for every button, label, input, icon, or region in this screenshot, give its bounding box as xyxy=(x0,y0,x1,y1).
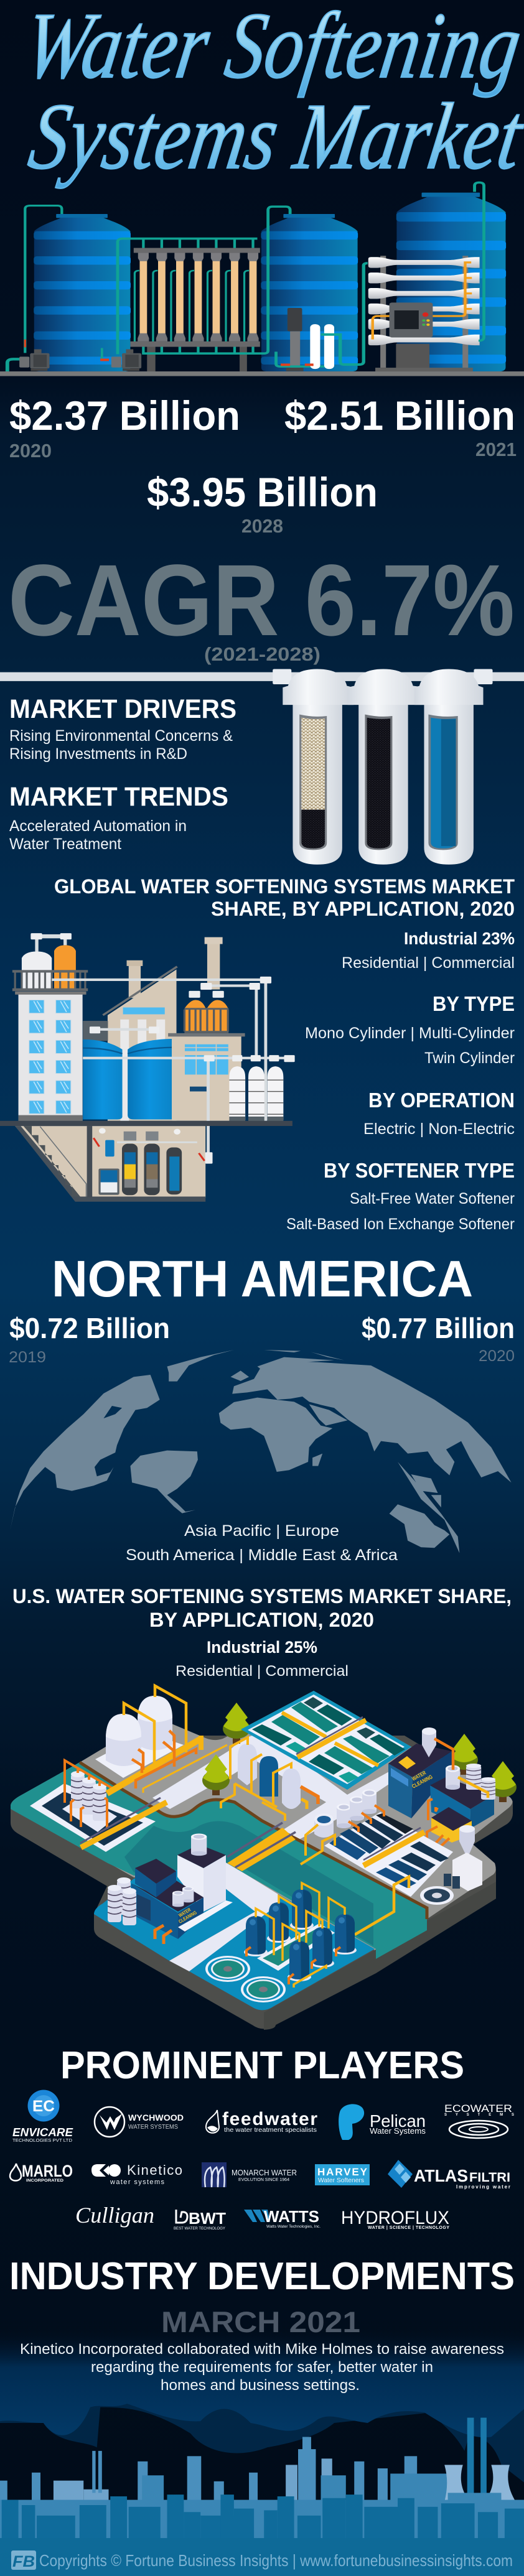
market value 2021 xyxy=(284,393,517,460)
africa xyxy=(219,1398,332,1472)
illustration: water treatment plant with tanks xyxy=(0,182,524,376)
blue softener tanks xyxy=(83,1039,172,1120)
basement with stairs and softeners xyxy=(0,1121,292,1202)
by operation segment: BY OPERATION xyxy=(368,1089,515,1112)
logo: Wychwood: WYCHWOOD xyxy=(128,2113,184,2123)
logo: Envicare: EC xyxy=(32,2098,55,2115)
market value 2021: 2021 xyxy=(475,439,517,460)
logo: Pelican xyxy=(339,2104,426,2140)
global market share heading xyxy=(54,875,515,920)
market value 2028: $3.95 Billion xyxy=(147,469,378,515)
water cleaning building: CLEANING xyxy=(411,1774,434,1790)
market drivers: MARKET DRIVERS xyxy=(9,694,236,724)
membrane filter rack xyxy=(25,206,290,371)
U.S. application share: Industrial 25% xyxy=(207,1638,317,1657)
market value 2028 xyxy=(147,469,378,537)
lower water cleaning building: WATER xyxy=(178,1907,192,1918)
logo: Atlas Filtri: ATLAS xyxy=(414,2166,468,2185)
by type segment xyxy=(305,992,515,1067)
north america value 2020: $0.77 Billion xyxy=(362,1312,515,1344)
logo: EcoWater: ECOWATER xyxy=(444,2103,512,2114)
blue storage tanks xyxy=(34,193,506,371)
arabian peninsula xyxy=(309,1404,347,1426)
grey pipework xyxy=(52,980,294,1156)
lower water cleaning building xyxy=(108,1834,233,1944)
australia xyxy=(390,1504,449,1548)
logo: Marlo: INCORPORATED xyxy=(26,2178,63,2183)
logo: Wychwood xyxy=(95,2107,184,2137)
footer logo and copyright: FB xyxy=(12,2553,35,2570)
logo: Atlas Filtri: FILTRI xyxy=(469,2170,510,2185)
U.S. application share: Residential | Commercial xyxy=(175,1663,349,1680)
application share list: Residential | Commercial xyxy=(342,954,515,972)
industry development description xyxy=(20,2341,504,2394)
tank island ground xyxy=(225,1760,326,1830)
application share list: Industrial 23% xyxy=(404,929,515,948)
logo: BWT: BWT xyxy=(189,2209,226,2228)
market value 2021: $2.51 Billion xyxy=(284,393,515,439)
March 2021 date: MARCH 2021 xyxy=(161,2305,360,2338)
footer band xyxy=(0,2538,524,2576)
dark blue tanks on lower plate xyxy=(205,1883,357,2002)
logo: Envicare xyxy=(12,2090,73,2143)
central yellow bridge xyxy=(227,1823,296,1871)
logo: Hydroflux: WATER | SCIENCE | TECHNOLOGY xyxy=(368,2226,449,2230)
U.S. application share xyxy=(175,1638,349,1680)
front smog layer xyxy=(0,2328,524,2437)
logo: EcoWater: SYSTEMS xyxy=(444,2113,514,2117)
logo: BWT: BEST WATER TECHNOLOGY xyxy=(174,2226,226,2231)
other regions list xyxy=(126,1522,398,1564)
other regions list: South America | Middle East & Africa xyxy=(126,1546,398,1564)
market drivers: Rising Environmental Concerns & xyxy=(9,727,233,745)
market value 2020: $2.37 Billion xyxy=(9,393,240,439)
central process tanks xyxy=(221,1737,318,1821)
left basin with silos xyxy=(30,1760,167,1852)
teal water channel xyxy=(11,1762,427,1959)
market value 2020: 2020 xyxy=(9,440,52,462)
market value 2028: 2028 xyxy=(241,515,283,537)
by operation segment: Electric | Non-Electric xyxy=(363,1120,515,1138)
application share list xyxy=(342,929,515,972)
by softener type segment: Salt-Free Water Softener xyxy=(350,1190,515,1207)
logo: BWT xyxy=(174,2209,226,2231)
U.S. market share heading: BY APPLICATION, 2020 xyxy=(149,1609,374,1631)
industry development description: regarding the requirements for safer, better water in xyxy=(91,2359,433,2376)
industry development description: homes and business settings. xyxy=(161,2377,360,2394)
north america heading: NORTH AMERICA xyxy=(52,1250,473,1308)
logo: Hydroflux: HYDROFLUX xyxy=(341,2208,449,2228)
logo: Watts xyxy=(244,2207,320,2229)
water cleaning building: WATER xyxy=(411,1769,427,1782)
by type segment: BY TYPE xyxy=(433,992,515,1015)
pumps and small pipes xyxy=(7,263,368,371)
global market share heading: GLOBAL WATER SOFTENING SYSTEMS MARKET xyxy=(54,875,515,898)
logo: Watts: Watts Water Technologies, Inc. xyxy=(266,2225,320,2229)
U.S. market share heading xyxy=(12,1585,512,1631)
lower blue plate xyxy=(94,1860,375,2010)
north america value 2020 xyxy=(362,1312,515,1365)
market trends: MARKET TRENDS xyxy=(9,782,228,812)
logo: Marlo: MARLO xyxy=(22,2162,73,2180)
logo: Harvey xyxy=(315,2164,370,2185)
domed tanks xyxy=(95,1686,227,1793)
north america value 2020: 2020 xyxy=(479,1347,515,1365)
illustration: isometric water treatment plant xyxy=(11,1686,517,2030)
market drivers xyxy=(9,694,236,763)
market trends: Accelerated Automation in xyxy=(9,817,187,835)
reverse osmosis unit xyxy=(368,182,484,371)
logo: Watts: WATTS xyxy=(264,2207,319,2226)
south america xyxy=(130,1451,198,1514)
right building xyxy=(168,1000,245,1121)
southeast asia islands xyxy=(398,1462,459,1553)
top settling pool xyxy=(241,1691,411,1790)
eurasia xyxy=(232,1360,512,1482)
logo: Pelican: Pelican xyxy=(370,2111,426,2131)
skyline front row xyxy=(2,2495,524,2540)
north america value 2019 xyxy=(9,1312,170,1366)
lower water cleaning building: CLEANING xyxy=(178,1910,198,1925)
logo: Envicare: TECHNOLOGIES PVT LTD xyxy=(12,2139,72,2143)
north america value 2019: $0.72 Billion xyxy=(9,1312,170,1344)
logo: Kinetico xyxy=(91,2162,182,2186)
bottom illustration: smog clouds and city skyline xyxy=(0,2328,524,2540)
logo: feedwater: the water treatment specialists xyxy=(224,2126,317,2134)
by softener type segment xyxy=(286,1159,515,1233)
north america value 2019: 2019 xyxy=(9,1349,46,1366)
market trends xyxy=(9,782,228,853)
prominent players heading: PROMINENT PLAYERS xyxy=(60,2044,464,2087)
logo: Atlas Filtri xyxy=(388,2160,510,2190)
british isles and scandinavia xyxy=(231,1350,344,1381)
white pressure cylinders xyxy=(90,977,295,1121)
filter 2: carbon xyxy=(347,669,426,865)
greenland xyxy=(167,1350,234,1382)
by softener type segment: BY SOFTENER TYPE xyxy=(324,1159,515,1182)
U.S. market share heading: U.S. WATER SOFTENING SYSTEMS MARKET SHARE, xyxy=(12,1585,512,1607)
industry developments heading: INDUSTRY DEVELOPMENTS xyxy=(9,2255,515,2298)
tower building xyxy=(12,933,88,1122)
illustration: water filter cartridges on pipe xyxy=(0,669,524,865)
logo: Wychwood: WATER SYSTEMS xyxy=(128,2123,178,2131)
industry development description: Kinetico Incorporated collaborated with Mike Holmes to raise awareness xyxy=(20,2341,504,2358)
illustration: water softening building cross-section xyxy=(0,933,295,1202)
back smog layer xyxy=(0,2378,524,2482)
logo: feedwater: feedwater xyxy=(222,2109,317,2129)
ground line xyxy=(0,371,524,376)
title xyxy=(18,0,524,189)
global market share heading: SHARE, BY APPLICATION, 2020 xyxy=(211,898,515,920)
by type segment: Mono Cylinder | Multi-Cylinder xyxy=(305,1025,515,1042)
logo: Kinetico: water systems xyxy=(110,2178,164,2186)
logo: Harvey: Water Softeners xyxy=(318,2177,364,2184)
trees xyxy=(202,1703,517,1802)
north america xyxy=(10,1375,160,1530)
filter 1: gravel xyxy=(283,669,353,865)
CAGR callout: (2021-2028) xyxy=(204,643,320,665)
logo: Marlo xyxy=(10,2162,73,2183)
logo: Monarch Water: MONARCH WATER xyxy=(232,2169,297,2177)
logo: Envicare: ENVICARE xyxy=(12,2126,73,2139)
logo: EcoWater xyxy=(444,2103,514,2138)
logo: Pelican: Water Systems xyxy=(370,2126,426,2136)
by type segment: Twin Cylinder xyxy=(424,1049,515,1067)
logo: Harvey: HARVEY xyxy=(317,2166,368,2178)
chimneys and back building xyxy=(83,937,223,1121)
by operation segment xyxy=(363,1089,515,1138)
logo: Kinetico: Kinetico xyxy=(127,2162,182,2178)
by softener type segment: Salt-Based Ion Exchange Softener xyxy=(286,1216,515,1233)
filter 3: blue media xyxy=(414,669,484,865)
skyline back row xyxy=(0,2418,524,2540)
water cleaning building xyxy=(388,1727,495,1848)
logo: Culligan: Culligan xyxy=(75,2203,154,2228)
plant base slab xyxy=(11,1691,513,2030)
lower-right settling tanks xyxy=(301,1789,482,1935)
logo: Atlas Filtri: Improving water xyxy=(456,2184,510,2190)
lavender roads xyxy=(152,1732,391,1841)
madagascar xyxy=(312,1454,322,1466)
world globe map xyxy=(10,1350,512,1553)
market value 2020 xyxy=(9,393,240,462)
market trends: Water Treatment xyxy=(9,835,121,853)
other regions list: Asia Pacific | Europe xyxy=(184,1522,339,1540)
logo: Monarch Water: EVOLUTION SINCE 1964 xyxy=(238,2178,289,2182)
market drivers: Rising Investments in R&D xyxy=(9,745,187,763)
logo: Monarch Water xyxy=(202,2162,297,2187)
